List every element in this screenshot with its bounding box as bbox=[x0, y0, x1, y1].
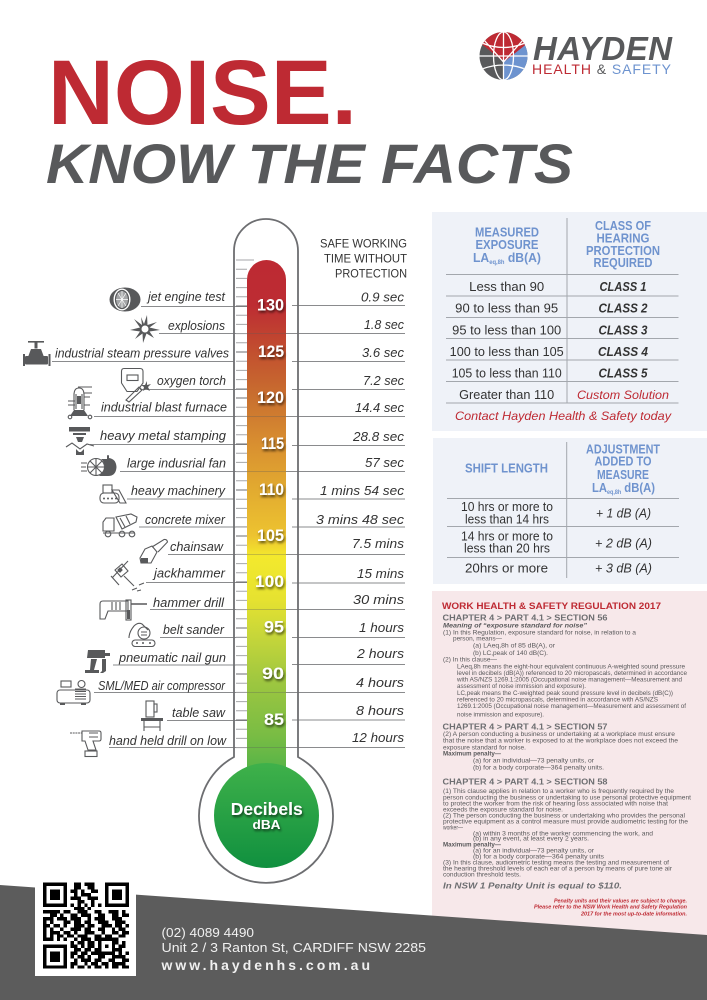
section 56: referenced to 20 micropascals, determined in accordance with AS/NZS bbox=[457, 698, 658, 704]
section 58: to protect the worker from the risk of hearing loss associated with noise that bbox=[443, 801, 668, 807]
table rows: shift lengths: 14 hrs or more to bbox=[461, 530, 553, 544]
decibel scale numbers: 115 bbox=[261, 434, 284, 453]
title: NOISE: NOISE. bbox=[48, 42, 357, 144]
logo tagline: HEALTH & SAFETY bbox=[532, 61, 672, 77]
section 58: (a) within 3 months of the worker commencing the work, and bbox=[473, 832, 653, 838]
table header: adjustment: LA bbox=[592, 481, 609, 495]
bulb bbox=[214, 763, 319, 868]
icon: globe bbox=[479, 32, 530, 80]
contact details: (02) 4089 4490 bbox=[162, 925, 254, 940]
QR code bbox=[35, 878, 136, 976]
decibel scale numbers: 110 bbox=[259, 480, 284, 499]
section 58 bbox=[442, 777, 691, 878]
safe working times: 3 mins 48 sec bbox=[316, 512, 405, 527]
noise source labels: industrial blast furnace bbox=[101, 401, 227, 415]
table header: measured exposure: eq,8h bbox=[489, 260, 505, 266]
section 56: Meaning of “exposure standard for noise” bbox=[443, 623, 587, 629]
icon: table saw bbox=[141, 701, 163, 731]
table header: class of hearing protection: HEARING bbox=[596, 232, 650, 246]
icon: heavy machinery bbox=[100, 485, 126, 503]
noise source labels: large indusrial fan bbox=[127, 457, 226, 471]
icon: blast furnace bbox=[68, 387, 92, 419]
table rows: class: CLASS 3 bbox=[598, 324, 648, 338]
noise source labels: heavy metal stamping bbox=[100, 429, 226, 443]
section 56: CHAPTER 4 > PART 4.1 > SECTION 56 bbox=[442, 613, 608, 623]
section 58: the hearing threshold levels of each ear of a person by means of pure tone air bbox=[443, 866, 672, 872]
safe working times: 14.4 sec bbox=[355, 400, 404, 415]
icon: steam valve bbox=[23, 341, 50, 366]
table rows: class: Custom Solution bbox=[577, 388, 669, 402]
decibel scale numbers bbox=[255, 296, 284, 729]
table rows: shift lengths: less than 14 hrs bbox=[465, 513, 549, 527]
table header: adjustment: eq,8h bbox=[607, 490, 621, 496]
safe working times: 7.5 mins bbox=[352, 536, 405, 551]
table rows: class: CLASS 2 bbox=[598, 302, 648, 316]
panel: hearing protection class table bbox=[432, 212, 707, 431]
section 58: (b) for a body corporate—364 penalty units bbox=[473, 854, 604, 860]
noise source labels: concrete mixer bbox=[145, 513, 226, 527]
noise source labels: SML/MED air compressor bbox=[98, 679, 226, 693]
safe working times bbox=[316, 290, 405, 745]
safe working times: 1.8 sec bbox=[364, 317, 404, 332]
table header: class of hearing protection bbox=[586, 219, 660, 270]
icon: metal stamping press bbox=[66, 427, 94, 455]
section 56 bbox=[442, 613, 688, 719]
thermometer bbox=[199, 219, 333, 883]
icon: jet engine bbox=[110, 288, 140, 312]
bulb label bbox=[231, 799, 303, 832]
table header: class of hearing protection: REQUIRED bbox=[594, 256, 652, 270]
table header: adjustment bbox=[586, 443, 660, 496]
section 56: LAeq,8h means the eight-hour equivalent continuous A-weighted sound pressure bbox=[457, 664, 686, 670]
bulb label: Decibels bbox=[231, 799, 303, 819]
table header: adjustment: ADJUSTMENT bbox=[586, 443, 660, 457]
decibel scale numbers: 105 bbox=[257, 526, 284, 545]
icon: air compressor bbox=[57, 680, 90, 705]
decibel scale numbers: 95 bbox=[264, 618, 284, 637]
row connector lines bbox=[52, 306, 405, 748]
table rows: exposure: Greater than 110 bbox=[459, 388, 554, 402]
section 58: (a) for an individual—73 penalty units, or bbox=[473, 848, 594, 854]
major ticks bbox=[236, 306, 254, 720]
section 56: with AS/NZS 1269.1:2005 (Occupational noise management—Measurement and bbox=[456, 678, 682, 684]
icon: concrete mixer bbox=[103, 514, 137, 537]
table header: class of hearing protection: PROTECTION bbox=[586, 244, 660, 258]
noise source labels: explosions bbox=[168, 319, 225, 333]
section 56: (a) LAeq,8h of 85 dB(A), or bbox=[473, 643, 555, 649]
table rows: adjustments: + 2 dB (A) bbox=[595, 537, 652, 551]
section 56: (b) LC,peak of 140 dB(C). bbox=[473, 651, 548, 657]
safe working times: 15 mins bbox=[357, 566, 405, 581]
table rows: exposure: Less than 90 bbox=[469, 280, 544, 294]
icon: explosion bbox=[130, 315, 160, 343]
contact details: Unit 2 / 3 Ranton St, CARDIFF NSW 2285 bbox=[162, 940, 426, 955]
safe working times: 7.2 sec bbox=[363, 373, 404, 388]
icon: hammer drill bbox=[100, 600, 147, 620]
scale ticks bbox=[236, 260, 254, 748]
decibel scale numbers: 130 bbox=[257, 296, 284, 315]
table rows: shift lengths: 20hrs or more bbox=[465, 562, 548, 576]
section 56: (2) In this clause— bbox=[443, 658, 497, 664]
safe working times: 8 hours bbox=[356, 703, 405, 718]
table rows: exposure: 105 to less than 110 bbox=[452, 367, 562, 381]
table rows: class: CLASS 5 bbox=[598, 367, 648, 381]
section 57: Maximum penalty— bbox=[443, 752, 501, 758]
noise source labels: heavy machinery bbox=[131, 484, 226, 498]
noise source labels: jet engine test bbox=[146, 290, 226, 304]
section 58: person conducting the business or undertaking to use personal protective equipment bbox=[443, 795, 691, 801]
noise source labels: pneumatic nail gun bbox=[118, 651, 226, 665]
icon: pneumatic nail gun bbox=[85, 650, 110, 673]
table rows: shift lengths: 10 hrs or more to bbox=[461, 500, 553, 514]
noise source labels: industrial steam pressure valves bbox=[55, 347, 229, 361]
table rows: shift lengths: less than 20 hrs bbox=[464, 542, 550, 556]
table rows: class: CLASS 1 bbox=[600, 280, 647, 294]
panel: work health and safety regulation bbox=[432, 591, 707, 941]
section 56: LC,peak means the C-weighted peak sound pressure level in decibels (dB(C)) bbox=[457, 691, 673, 697]
heading: safe working time: SAFE WORKING bbox=[320, 239, 407, 251]
table header: class of hearing protection: CLASS OF bbox=[595, 219, 651, 233]
safe working times: 12 hours bbox=[352, 730, 405, 745]
heading: safe working time bbox=[320, 239, 407, 281]
footer band bbox=[0, 885, 707, 1000]
table rows: adjustments bbox=[595, 507, 652, 576]
mercury column bbox=[247, 260, 286, 780]
regulation heading: WORK HEALTH & SAFETY REGULATION 2017 bbox=[442, 601, 661, 612]
section 58: exceeds the exposure standard for noise. bbox=[443, 807, 563, 813]
table header: adjustment: MEASURE bbox=[597, 468, 649, 482]
decibel scale numbers: 100 bbox=[255, 572, 284, 591]
decibel scale numbers: 85 bbox=[264, 710, 284, 729]
safe working times: 1 hours bbox=[359, 620, 405, 635]
section 57: (a) for an individual—73 penalty units, or bbox=[473, 758, 594, 764]
table rows: exposure: 95 to less than 100 bbox=[452, 324, 561, 338]
section 58: protective equipment as a control measure must provide audiometric testing for the bbox=[443, 820, 689, 826]
safe working times: 2 hours bbox=[356, 646, 405, 661]
noise source labels: hand held drill on low bbox=[109, 734, 227, 748]
bulb label: dBA bbox=[252, 818, 280, 832]
table header: measured exposure: EXPOSURE bbox=[476, 238, 538, 252]
icon: cordless drill bbox=[70, 731, 101, 756]
icon: industrial fan bbox=[81, 455, 116, 476]
section 58: (3) In this clause, audiometric testing means the testing and measurement of bbox=[443, 860, 669, 866]
heading: safe working time: PROTECTION bbox=[335, 269, 407, 281]
decibel scale numbers: 90 bbox=[262, 664, 284, 683]
icon: jackhammer bbox=[111, 561, 144, 591]
section 58: CHAPTER 4 > PART 4.1 > SECTION 58 bbox=[442, 777, 608, 787]
noise source labels: table saw bbox=[172, 706, 226, 720]
section 57: exposure standard for noise. bbox=[443, 745, 526, 751]
table header: shift length: SHIFT LENGTH bbox=[465, 462, 548, 476]
table rows: adjustments: + 3 dB (A) bbox=[595, 562, 652, 576]
red disclaimer: Please refer to the NSW Work Health and Safety Regulation bbox=[534, 905, 687, 911]
section 56: 1269.1:2005 (Occupational noise management—Measurement and assessment of bbox=[457, 704, 686, 710]
crossing lines over column bbox=[247, 334, 286, 748]
section 58: Maximum penalty— bbox=[443, 843, 501, 849]
safe working times: 1 mins 54 sec bbox=[320, 483, 405, 498]
noise source labels: chainsaw bbox=[170, 540, 224, 554]
section 58: worker— bbox=[442, 825, 463, 831]
contact details bbox=[160, 925, 426, 973]
section 56: assessment of noise immission and exposure). bbox=[457, 684, 586, 690]
decibel scale numbers: 120 bbox=[257, 388, 284, 407]
section 56: noise immission and exposure). bbox=[457, 713, 544, 719]
subtitle: KNOW THE FACTS: KNOW THE FACTS bbox=[46, 132, 573, 195]
section 57: (2) A person conducting a business or undertaking at a workplace must ensure bbox=[443, 732, 676, 738]
section 58: (2) The person conducting the business or undertaking who provides the personal bbox=[443, 814, 685, 820]
section 58: (b) in any event, at least every 2 years. bbox=[473, 837, 589, 843]
table header: measured exposure: LA bbox=[473, 251, 490, 265]
table header: measured exposure: MEASURED bbox=[475, 226, 539, 240]
panel: shift length adjustment table bbox=[433, 438, 707, 584]
safe working times: 3.6 sec bbox=[362, 345, 404, 360]
section 58: conduction threshold tests. bbox=[443, 872, 521, 878]
noise source labels: oxygen torch bbox=[157, 374, 226, 388]
table rows: adjustments: + 1 dB (A) bbox=[596, 507, 651, 521]
noise source labels: hammer drill bbox=[153, 596, 225, 610]
section 58: (1) This clause applies in relation to a worker who is frequently required by the bbox=[443, 789, 675, 795]
red disclaimer: 2017 for the most up-to-date information. bbox=[580, 912, 687, 918]
section 56: person, means— bbox=[453, 637, 502, 643]
icon: oxygen torch bbox=[122, 368, 151, 402]
table rows: exposure: 90 to less than 95 bbox=[455, 302, 558, 316]
section 56: (1) In this Regulation, exposure standard for noise, in relation to a bbox=[443, 631, 637, 637]
contact details: www.haydenhs.com.au bbox=[160, 957, 370, 973]
safe working times: 57 sec bbox=[365, 455, 404, 470]
table header: adjustment: dB(A) bbox=[621, 481, 655, 495]
logo: Hayden Health & Safety bbox=[479, 30, 673, 80]
safe working times: 0.9 sec bbox=[361, 290, 405, 305]
table header: adjustment: ADDED TO bbox=[594, 455, 652, 469]
icon: chainsaw bbox=[140, 539, 168, 563]
logo wordmark: HAYDEN bbox=[533, 30, 673, 67]
table header: measured exposure: dB(A) bbox=[504, 251, 541, 265]
safe working times: 28.8 sec bbox=[352, 429, 405, 444]
red disclaimer bbox=[534, 899, 687, 918]
table rows: class bbox=[577, 280, 669, 402]
table rows: class: CLASS 4 bbox=[598, 345, 648, 359]
noise source labels: belt sander bbox=[163, 623, 225, 637]
noise source labels bbox=[55, 290, 229, 748]
section 57: that the noise that a worker is exposed to at the workplace does not exceed the bbox=[443, 739, 679, 745]
heading: safe working time: TIME WITHOUT bbox=[324, 254, 407, 266]
section 57 bbox=[442, 721, 679, 771]
red disclaimer: Penalty units and their values are subject to change. bbox=[554, 899, 687, 905]
section 57: CHAPTER 4 > PART 4.1 > SECTION 57 bbox=[442, 721, 608, 731]
table rows: exposure bbox=[450, 280, 564, 402]
section 57: (b) for a body corporate—364 penalty units. bbox=[473, 765, 604, 771]
call to action: Contact Hayden Health & Safety today bbox=[455, 409, 672, 423]
thermometer outline bbox=[199, 219, 333, 883]
safe working times: 4 hours bbox=[356, 675, 405, 690]
table header: measured exposure bbox=[473, 226, 541, 266]
table rows: exposure: 100 to less than 105 bbox=[450, 345, 564, 359]
penalty unit note: In NSW 1 Penalty Unit is equal to $110. bbox=[443, 881, 622, 891]
noise source labels: jackhammer bbox=[152, 567, 226, 581]
section 56: level in decibels (dB(A)) referenced to 20 micropascals, determined in accordance bbox=[457, 671, 688, 677]
table rows: shift lengths bbox=[461, 500, 553, 576]
safe working times: 30 mins bbox=[353, 592, 405, 607]
icon: belt sander bbox=[129, 623, 155, 646]
decibel scale numbers: 125 bbox=[258, 342, 284, 361]
